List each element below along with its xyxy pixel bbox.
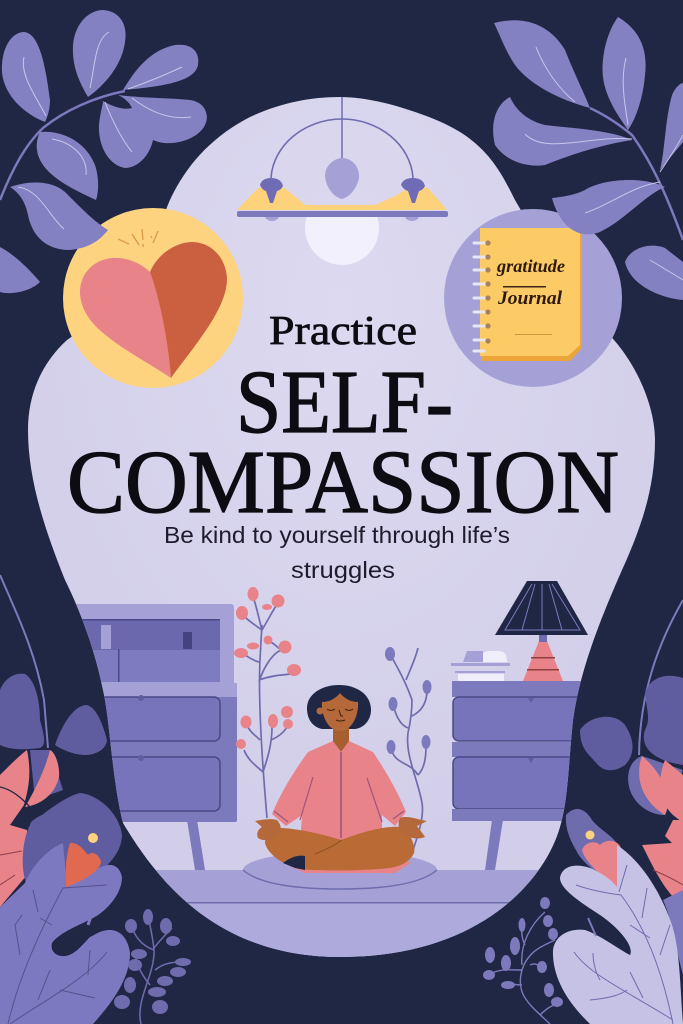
meditating person xyxy=(255,685,427,873)
subtitle xyxy=(164,522,510,583)
stacked books xyxy=(451,651,510,681)
lamp glow bulb xyxy=(305,217,379,265)
title line: Practice: Practice xyxy=(269,307,417,353)
right dresser xyxy=(452,681,593,870)
crossed legs xyxy=(290,862,412,873)
left dresser xyxy=(102,683,237,870)
right plant xyxy=(385,647,432,853)
hands xyxy=(255,819,281,840)
bottom left small sprig xyxy=(114,909,191,1024)
subtitle: struggles xyxy=(291,557,395,583)
left flowering plant xyxy=(234,587,301,818)
floor xyxy=(156,870,539,957)
subtitle: Be kind to yourself through life’s xyxy=(164,522,510,548)
icon: gratitude journal xyxy=(444,209,622,387)
face and neck xyxy=(333,725,349,752)
left bookcase xyxy=(70,604,234,686)
bottom right foliage xyxy=(553,600,683,1024)
bottom left foliage xyxy=(0,575,130,1024)
top left branch xyxy=(0,10,207,293)
top right branch xyxy=(493,17,683,300)
bottom right small sprig xyxy=(483,897,563,1024)
icon: gratitude journal: gratitude xyxy=(496,256,565,276)
title line: SELF-: SELF- xyxy=(236,353,453,452)
spiral binding xyxy=(474,240,491,351)
table lamp xyxy=(495,581,588,681)
hair xyxy=(307,685,371,729)
pink top xyxy=(272,741,406,845)
central blob panel xyxy=(28,97,655,957)
title line: COMPASSION: COMPASSION xyxy=(67,433,619,532)
meditation cushion xyxy=(243,851,437,889)
title xyxy=(67,307,619,532)
icon: gratitude journal: Journal xyxy=(497,288,563,309)
icon: heart circle xyxy=(63,208,243,388)
pendant lamp xyxy=(237,97,448,265)
lamp shade yellow xyxy=(237,186,447,210)
